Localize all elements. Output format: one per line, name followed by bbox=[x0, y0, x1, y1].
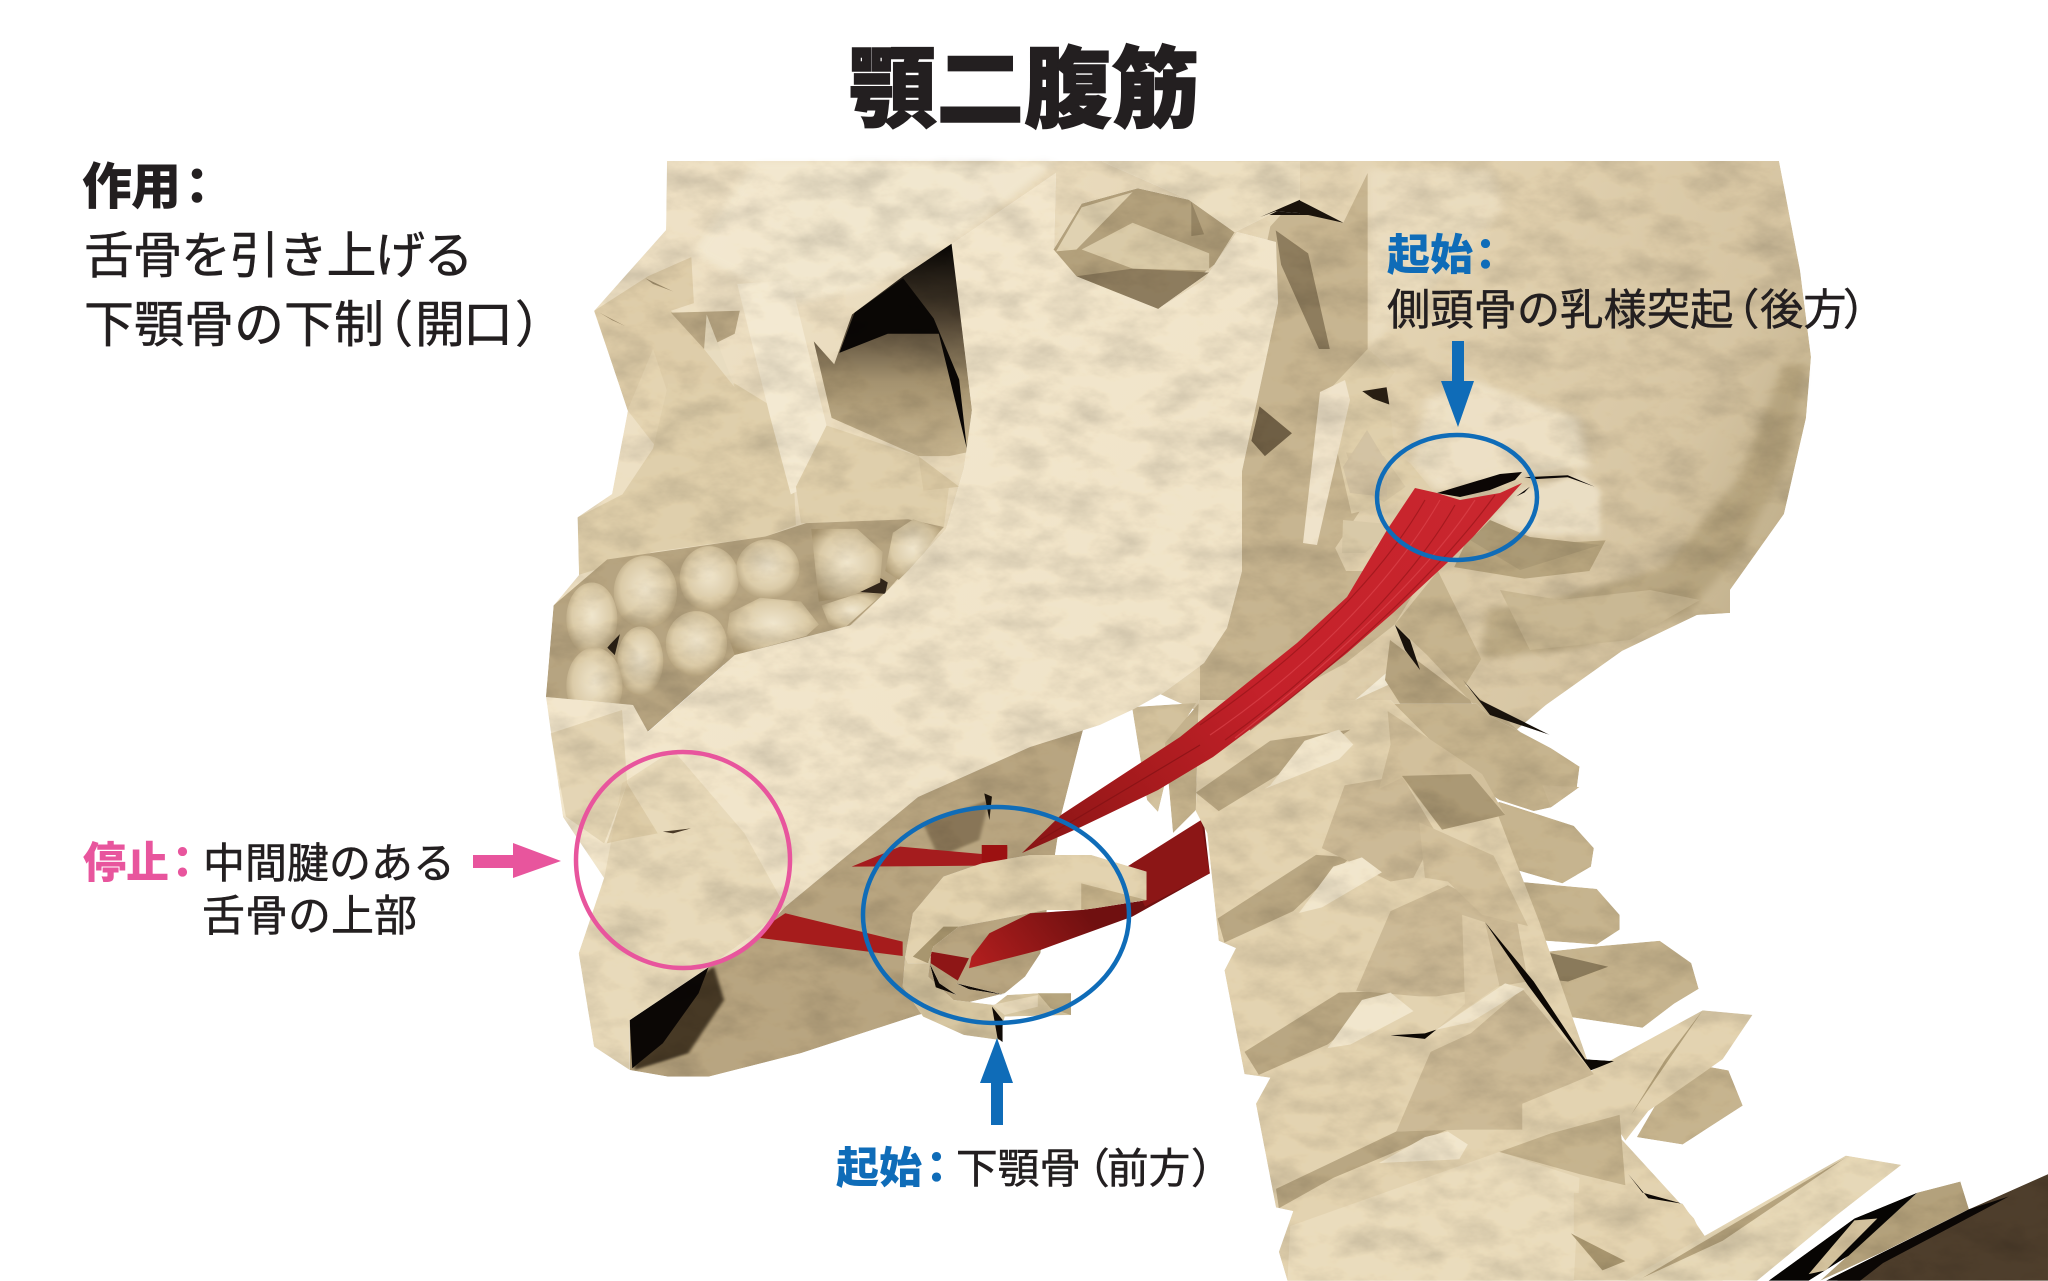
text block: action bbox=[82, 159, 565, 353]
action heading: ： bbox=[172, 159, 221, 215]
action line 2: （ bbox=[363, 297, 413, 353]
posterior origin label: ： bbox=[1464, 232, 1507, 280]
cervical spine bbox=[1196, 700, 2048, 1281]
light wing bbox=[1585, 1010, 1752, 1141]
circle: anterior origin blue bbox=[863, 807, 1129, 1023]
bones in front: mandible bbox=[546, 161, 1300, 1070]
anterior origin text: 下顎骨 bbox=[956, 1145, 1081, 1192]
circle: insertion pink bbox=[576, 752, 790, 968]
posterior origin text: （ bbox=[1716, 287, 1759, 335]
arrow: posterior origin down bbox=[1441, 341, 1474, 427]
anterior origin text: （ bbox=[1068, 1145, 1110, 1192]
insertion label: ： bbox=[161, 840, 204, 888]
posterior origin text: 後方 bbox=[1760, 287, 1847, 335]
hyoid lower ring bbox=[903, 957, 1071, 1042]
arrow: anterior origin up bbox=[980, 1038, 1013, 1125]
mastoid and occipital shading bbox=[1200, 169, 1806, 736]
action line 2: 開 bbox=[415, 297, 465, 353]
cranium silhouette bbox=[546, 161, 1811, 732]
ear region facets bbox=[1200, 173, 1427, 724]
dark cracks bbox=[1485, 922, 1614, 1070]
insertion label: 停止 bbox=[83, 840, 169, 888]
callout: anterior origin bbox=[836, 1145, 1233, 1193]
sigmoid notch bbox=[1054, 161, 1300, 309]
anterior origin label: 起始 bbox=[836, 1145, 922, 1193]
action line 2: ） bbox=[515, 297, 565, 353]
orbit socket bbox=[814, 244, 972, 456]
insertion text line 2: 舌骨の上部 bbox=[202, 893, 417, 941]
anterior origin text: ） bbox=[1191, 1145, 1233, 1192]
anterior origin label: ： bbox=[915, 1145, 958, 1193]
thorax shadow bbox=[1820, 1182, 1969, 1281]
crack at mastoid bbox=[1516, 475, 1595, 496]
posterior origin label: 起始 bbox=[1387, 232, 1473, 280]
action line 2: 口 bbox=[463, 297, 513, 353]
disc shading bbox=[1196, 730, 1448, 1208]
action line 1: 舌骨を引き上げる bbox=[84, 228, 472, 284]
muscle: posterior belly bbox=[1022, 472, 1522, 853]
title: 顎二腹筋 bbox=[849, 40, 1199, 139]
lateral masses bbox=[1322, 776, 1594, 1132]
chin shading bbox=[551, 710, 785, 1070]
circle: posterior origin blue bbox=[1377, 435, 1537, 560]
ridge bumps bbox=[1265, 730, 1468, 1163]
bones behind the muscles bbox=[546, 161, 1811, 1077]
callout: posterior origin bbox=[1387, 232, 1886, 335]
upper tooth backing bbox=[546, 519, 944, 732]
action heading: 作用 bbox=[82, 159, 180, 215]
action line 2: 下顎骨の下制 bbox=[84, 297, 384, 353]
muscle: lower segment behind hyoid bbox=[969, 820, 1210, 968]
nasal and maxilla facets bbox=[546, 161, 1056, 732]
muscle: anterior belly bbox=[750, 845, 1007, 981]
styloid spike and plate bbox=[1132, 703, 1196, 812]
inner surface of the mandible bbox=[630, 700, 1091, 1077]
insertion text line 1: 中間腱のある bbox=[203, 840, 455, 887]
articular plates bbox=[1379, 711, 1528, 926]
lower wing bbox=[1625, 1156, 1901, 1281]
callout: insertion bbox=[83, 840, 455, 941]
posterior origin text: 側頭骨の乳様突起 bbox=[1387, 287, 1733, 335]
hyoid arc bbox=[905, 855, 1147, 963]
column bbox=[1196, 700, 1723, 1281]
skull and cervical spine illustration bbox=[546, 161, 2048, 1281]
spike and neck facets near the muscle bbox=[1303, 380, 1700, 740]
anterior origin text: 前方 bbox=[1107, 1145, 1190, 1192]
transverse processes bbox=[1391, 704, 1743, 1144]
arrow: insertion pink bbox=[473, 843, 561, 878]
teeth bbox=[566, 519, 941, 724]
posterior origin text: ） bbox=[1843, 287, 1886, 335]
lowest vertebra bbox=[1287, 1152, 1580, 1281]
mandible bbox=[546, 173, 1278, 1020]
